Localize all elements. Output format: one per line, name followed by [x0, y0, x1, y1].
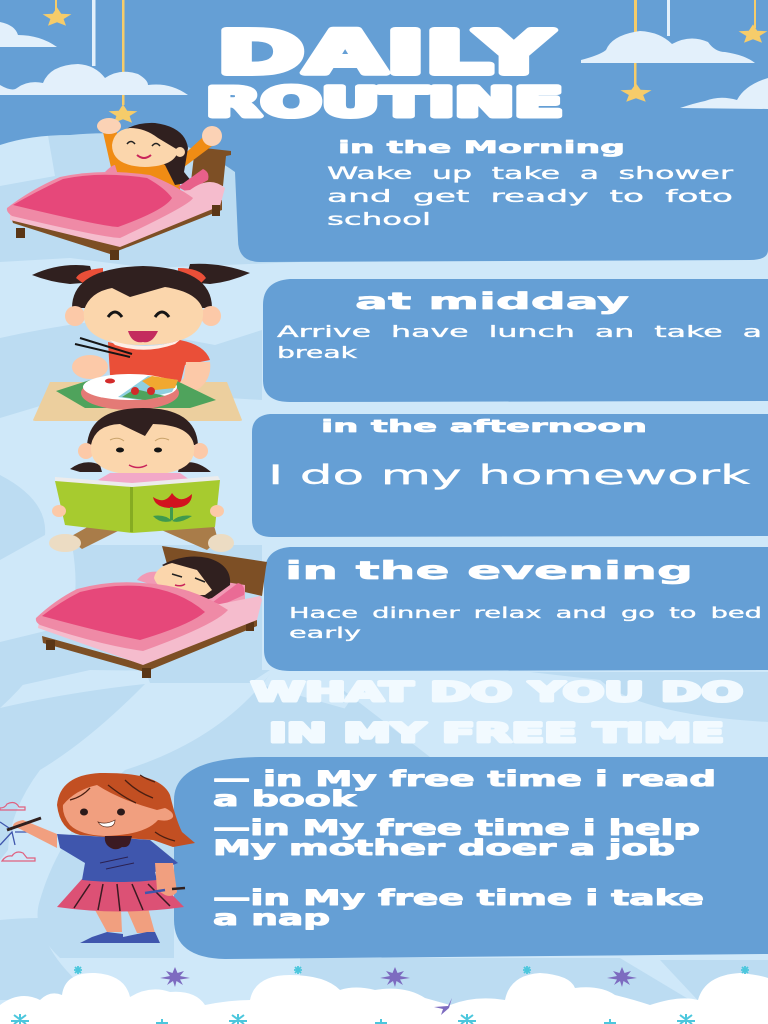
heading: what do you do in my free time: IN MY FREE TIME: [269, 718, 724, 749]
illustration: girl eating lunch: [32, 264, 250, 421]
heading: what do you do in my free time: WHAT DO YOU DO: [251, 677, 743, 708]
panel: free time list: —in My free time i take: [213, 886, 704, 910]
panel: at midday: [263, 279, 768, 402]
panel: in the afternoon: [252, 414, 768, 537]
illustration: girl with a pen: [0, 773, 195, 943]
panel: at midday: Arrive have lunch an take a: [277, 322, 762, 341]
panel: in the morning: school: [327, 210, 431, 230]
panel: in the morning: in the Morning: [338, 138, 625, 158]
title: DAILY: [217, 18, 554, 87]
panel: in the morning: and get ready to foto: [327, 187, 733, 207]
panel: in the evening: early: [289, 624, 361, 642]
panel: in the evening: Hace dinner relax and go to bed: [289, 604, 762, 622]
title: ROUTINE: [206, 80, 563, 126]
top header band: [0, 0, 768, 262]
hanging clouds and stars: [0, 0, 768, 123]
panel: free time list: [174, 757, 768, 959]
panel: free time list: — in My free time i read: [213, 767, 716, 791]
panel: free time list: —in My free time i help: [213, 816, 700, 840]
heading: what do you do in my free time: [251, 677, 743, 749]
bottom clouds and stars: [0, 966, 768, 1024]
illustration: girl sleeping in bed: [36, 546, 267, 678]
panel: free time list: a book: [213, 787, 358, 811]
panel: in the morning: [327, 138, 733, 230]
panel: in the afternoon: I do my homework: [268, 460, 751, 491]
panel: free time list: My mother doer a job: [213, 836, 675, 860]
illustration: girl reading a book: [49, 408, 234, 552]
title: [206, 18, 563, 126]
panel: in the evening: in the evening: [285, 556, 693, 585]
illustration: girl waking up in bed: [7, 118, 231, 260]
panel: free time list: a nap: [213, 906, 330, 930]
panel: in the evening: [264, 547, 768, 671]
panel: at midday: break: [277, 343, 358, 362]
panel: in the afternoon: in the afternoon: [321, 417, 647, 437]
panel: in the morning: Wake up take a shower: [327, 164, 733, 184]
panel: at midday: at midday: [355, 289, 629, 315]
